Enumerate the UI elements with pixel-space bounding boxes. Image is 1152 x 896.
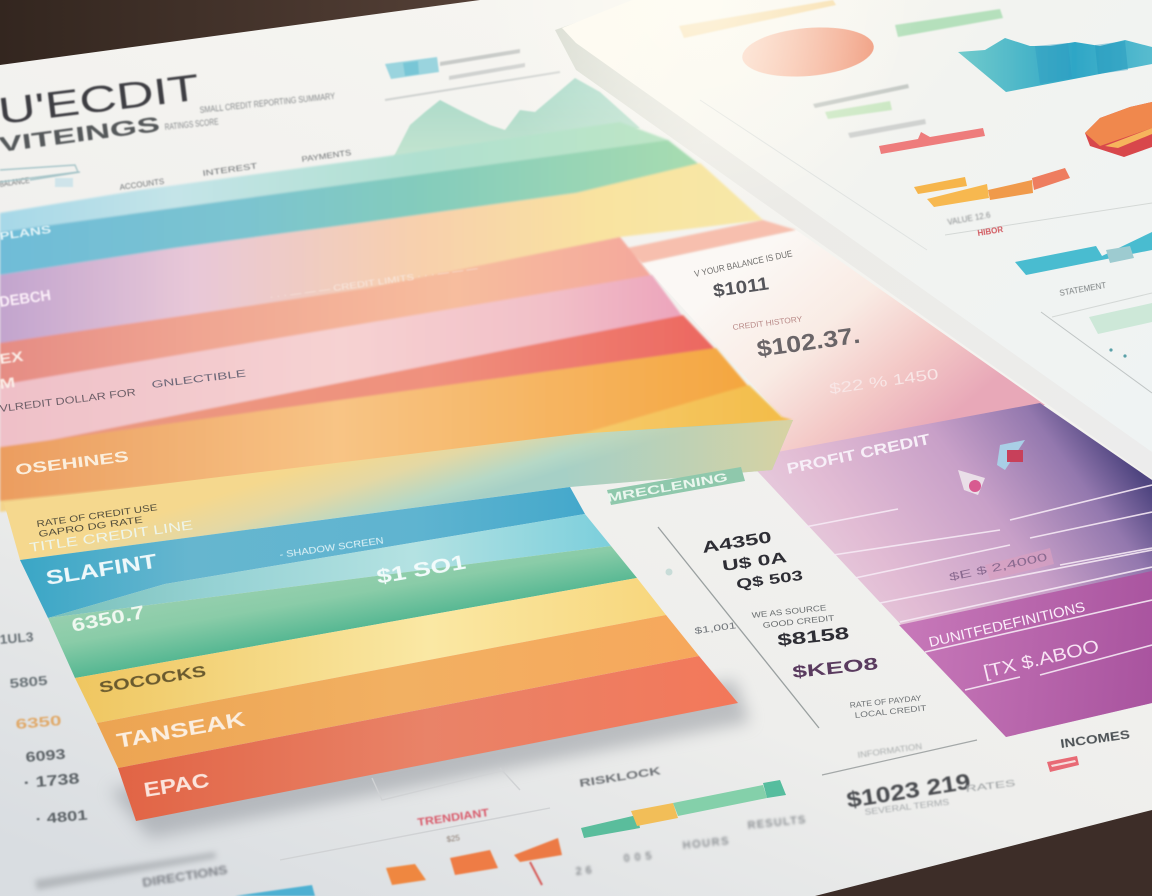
summary figure: [TX $.ABOO [981,636,1101,682]
upper band labels [0,224,478,392]
faint rows: · · · — — — CREDIT LIMITS · · · — — — [269,264,478,302]
progress heading: RISKLOCK [579,765,662,790]
left margin figures: · 1738 [23,770,80,792]
centre figures lower: $8158 [776,624,850,650]
band: light blue [48,514,611,618]
orange header bar [679,0,836,38]
left margin figures [0,629,88,827]
progress labels: RESULTS [747,814,806,832]
white grid rules [805,485,1152,690]
bottom band with label [35,852,228,890]
green section heading: MRECLENING [606,470,729,505]
pie chart: orange and red [1085,102,1152,157]
dark caption on pink band [0,368,247,555]
header title block [0,67,352,222]
progress labels: 26 [575,864,592,878]
header column labels: BALANCE [0,176,30,189]
magenta summary band [899,571,1152,737]
purple panel heading: PROFIT CREDIT [785,431,932,478]
vertical timeline line [658,527,819,728]
subtitle: VITEINGS [0,113,161,157]
results caption: V YOUR BALANCE IS DUE [693,248,793,279]
summary figure: $1023 219 [845,769,972,813]
sheet face [562,0,1152,452]
dark caption on pink band: VLREDIT DOLLAR FOR [0,387,136,415]
centre caption [849,693,927,720]
progress labels [575,814,806,878]
dark caption on pink band: OSEHINES [14,448,130,479]
red chart heading: TRENDIANT [417,807,490,829]
figure: 102.37: $102.37. [755,322,862,362]
warm light glow [480,0,920,220]
centre small text: WE AS SOURCE [751,603,827,620]
dark caption on pink band: RATE OF CREDIT USE [36,502,158,529]
centre figures top: Q$ 503 [735,567,804,592]
green section heading [606,467,745,505]
centre figures top: A4350 [701,529,773,557]
centre figures lower [776,624,879,682]
label: yellow: SOCOCKS [98,663,208,697]
sheet thickness edge [555,0,1152,478]
header column labels: ACCOUNTS [119,177,165,192]
bottom right summary [822,727,1131,817]
centre column [606,467,927,728]
left margin figures: 6350 [15,712,62,732]
label: orange: TANSEAK [115,709,248,753]
band: teal to green [0,140,700,275]
shadow under lower card [110,680,750,838]
summary notes: RATES [965,778,1016,794]
band: pale pink [0,275,683,452]
bar chart: orange steps [914,168,1070,207]
inline label chip [948,548,1054,584]
label: red: EPAC [142,770,211,802]
rule [822,740,977,775]
green table block [1089,303,1152,334]
band: lilac to yellow [0,163,763,345]
sheet small text: STATEMENT [1059,281,1107,298]
centre small text: GOOD CREDIT [762,613,835,630]
fold strip [4,420,793,560]
small red label: HIBOR [977,225,1004,238]
icon: small figure [958,440,1025,495]
icon: red striped tag [1047,756,1079,772]
figure: light blue: $1 SO1 [375,552,468,589]
header note lines: SMALL CREDIT REPORTING SUMMARY [199,91,335,115]
progress labels: 005 [623,850,652,865]
band: light blue to green [0,122,668,232]
summary heading: DUNITFEDEFINITIONS [927,598,1087,650]
bottom band with label: DIRECTIONS [141,863,228,890]
panel: results figures [693,248,939,398]
icon: small teal legend box [385,49,560,100]
centre caption: LOCAL CREDIT [854,703,927,720]
dark caption on pink band: TITLE CREDIT LINE [28,517,194,555]
summary footnote: SEVERAL TERMS [864,798,950,817]
header note lines [164,91,335,132]
band: deep blue [20,487,585,618]
small header chart [0,165,80,187]
progress labels: HOURS [682,835,729,852]
sheet small label: VALUE 12.6 [947,210,992,227]
timeline value: $1,001 [694,620,737,636]
summary caption: INFORMATION [857,742,923,760]
centre small text [751,603,835,630]
income label: INCOMES [1059,727,1131,751]
area chart: teal [958,38,1152,92]
centre figures top [701,529,804,592]
header column labels: INTEREST [202,161,258,178]
band: yellow [75,578,666,723]
band: salmon [0,237,652,387]
centre figures lower: $KEO8 [791,654,879,682]
list rows: gray and green [813,84,926,138]
title: U'ECDIT [0,67,201,132]
pie chart: salmon [740,22,876,82]
centre caption: RATE OF PAYDAY [849,693,923,710]
header note lines: RATINGS SCORE [164,116,219,132]
left margin figures: · 4801 [35,806,88,827]
bar chart: red [879,128,985,154]
timeline marker [666,568,672,576]
green header bar [895,9,1003,37]
white figure on pink: $22 % 1450 [828,366,939,398]
left margin figures: 5805 [9,673,48,691]
band: orange [0,348,749,503]
header column labels: CREDIT USE [41,206,94,222]
panel: right top report sheet [555,0,1152,478]
band: coral [0,315,716,450]
panel: purple credit panel [745,403,1152,737]
fold shading [560,420,793,487]
bottom bar chart: orange tabs [386,807,562,885]
panel: peach results panel [642,230,1045,458]
caption: deep blue: - SHADOW SCREEN [279,535,384,560]
inline label chip: $E $ 2,4000 [948,551,1048,584]
progress bar: green and yellow [579,765,786,838]
small dots [1109,348,1127,358]
bottom rule and connector [280,768,550,860]
pink strip behind card [627,220,796,263]
left margin figures: 6093 [25,746,66,765]
sheet rule lines [700,100,1152,393]
label: deep blue: SLAFINT [44,551,158,590]
band: orange [97,615,699,768]
small value: $25 [446,833,461,844]
panel: upper stacked colour bands [0,122,796,512]
figure: 1011: $1011 [712,273,770,301]
band: green [48,546,637,678]
band: yellow [0,385,793,512]
header column labels: PAYMENTS [301,148,352,164]
header column labels [0,148,352,222]
bar chart: blue [1015,232,1152,275]
bottom blue tab [235,885,315,896]
dark caption on pink band: GNLECTIBLE [151,368,247,391]
small label: CREDIT HISTORY [732,314,803,332]
dark caption on pink band: GAPRO DG RATE [38,514,143,539]
centre figures top: U$ 0A [721,549,788,575]
figure: green: 6350.7 [70,602,146,636]
panel: lower stacked colour card [20,487,738,821]
band: red [118,656,738,821]
area chart: pale green skyline [392,78,640,160]
